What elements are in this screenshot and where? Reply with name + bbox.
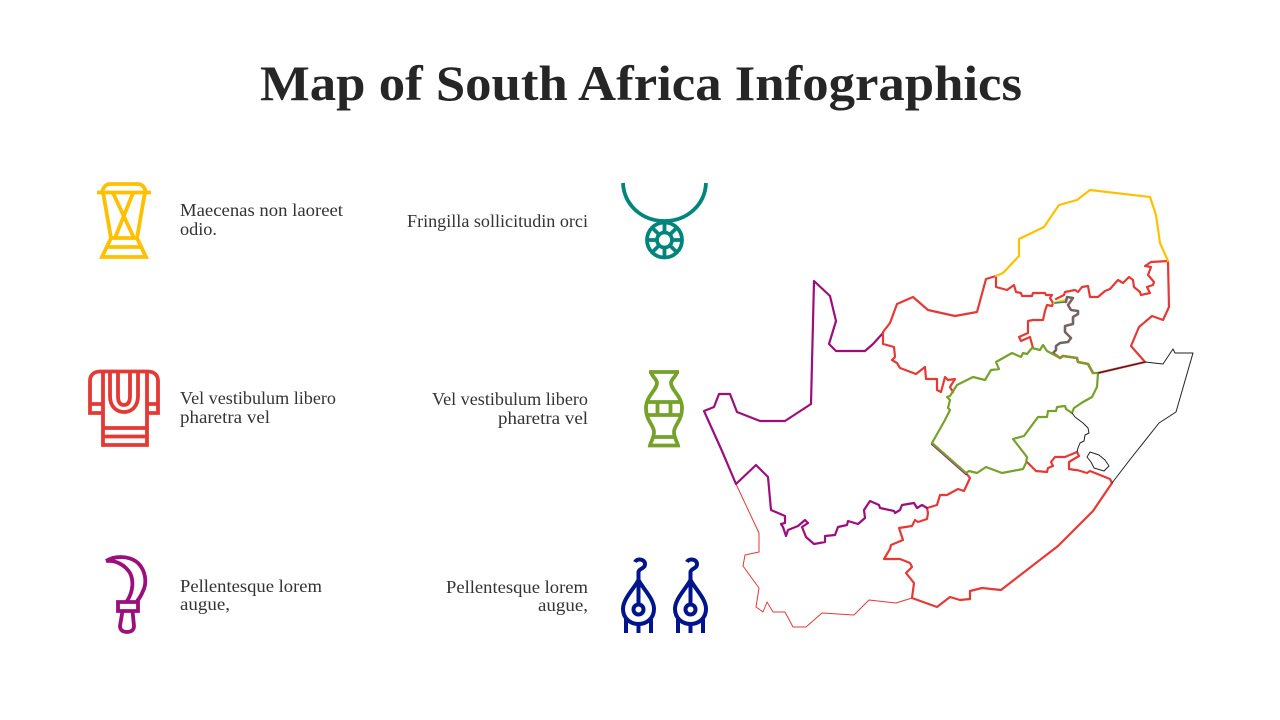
icon: right earring [675, 560, 706, 633]
text block: sickle: augue, [180, 594, 230, 614]
text block: drum: odio. [180, 219, 217, 239]
map region: KwaZulu-Natal coast [1072, 349, 1193, 483]
text block: drum [180, 200, 343, 239]
text block: vase: pharetra vel [498, 408, 588, 428]
icon: robe [90, 372, 158, 445]
icon: sickle [106, 557, 145, 632]
map region: Free State [932, 345, 1098, 473]
map region: Northern Cape outline [704, 281, 966, 544]
map region: Lesotho enclave [1087, 452, 1109, 471]
text block: sickle: Pellentesque lorem [180, 576, 322, 596]
text block: robe: pharetra vel [180, 407, 270, 427]
text block: earrings [446, 577, 588, 615]
icon: necklace [623, 183, 706, 258]
text block: earrings: augue, [538, 595, 588, 615]
map region: North West and Gauteng border [883, 276, 1053, 392]
item: robe, left row 2 [90, 372, 336, 445]
title: Map of South Africa Infographics [260, 55, 1022, 111]
item: drum, left row 1 [97, 184, 343, 257]
text block: earrings: Pellentesque lorem [446, 577, 588, 597]
text block: robe: Vel vestibulum libero [180, 388, 336, 408]
map of South Africa [704, 190, 1193, 627]
map region: Eastern Cape [884, 452, 1112, 607]
text block: necklace: Fringilla sollicitudin orci [407, 211, 588, 231]
icon: drum [97, 184, 151, 257]
text block: robe [180, 388, 336, 427]
text block: sickle [180, 576, 322, 614]
text block: vase: Vel vestibulum libero [432, 389, 588, 409]
text block: vase [432, 389, 588, 428]
item: vase, right row 2 [432, 372, 682, 446]
map region: Limpopo and Mpumalanga border [1056, 261, 1169, 373]
item: sickle, left row 3 [106, 557, 322, 632]
text block: drum: Maecenas non laoreet [180, 200, 343, 220]
item: earrings, right row 3 [446, 560, 706, 633]
map region: Gauteng [1053, 297, 1078, 353]
icon: vase [646, 372, 682, 446]
icon: earrings [623, 560, 706, 633]
icon: left earring [623, 560, 654, 633]
map region: Gauteng underlay [1053, 297, 1093, 373]
map region: Limpopo top border [996, 190, 1168, 303]
item: necklace, right row 1 [407, 183, 706, 258]
map region: Eastern Cape and Western Cape thin coast [736, 484, 912, 627]
